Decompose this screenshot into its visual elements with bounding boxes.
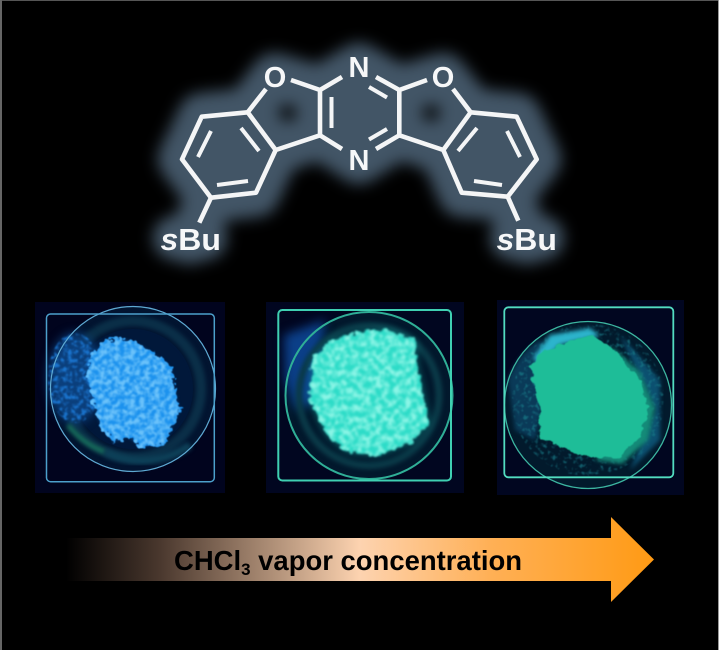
molecular glow halo: [175, 67, 542, 240]
dish outline: [504, 322, 672, 488]
atom labels: sBu: [496, 222, 557, 257]
skeletal bonds: [182, 77, 537, 223]
arrow label: vapor concentration: [251, 545, 522, 576]
photo: low vapor, blue powder: [35, 302, 225, 493]
powder: [530, 335, 648, 459]
powder halo: [90, 341, 178, 445]
atom labels: O: [264, 62, 286, 94]
atom labels: N: [349, 145, 369, 177]
slide frame: [504, 307, 673, 477]
arrow label: 3: [241, 560, 251, 579]
photo: medium vapor, teal powder: [266, 302, 464, 493]
gradient arrow: [66, 517, 654, 602]
photo: high vapor, green powder: [497, 300, 684, 495]
powder edge: [595, 345, 655, 464]
dish outline: [50, 306, 216, 472]
arrow label: CHCl: [174, 545, 241, 576]
slide frame: [46, 314, 214, 482]
slide frame: [278, 310, 451, 480]
atom labels: O: [432, 62, 454, 94]
powder halo: [312, 332, 427, 453]
powder: [310, 330, 429, 455]
powder: [88, 339, 180, 447]
chemical structure: [160, 52, 557, 257]
atom labels: sBu: [160, 222, 221, 257]
atom labels: N: [349, 52, 369, 84]
atom labels: [160, 52, 557, 257]
dish outline: [286, 312, 452, 479]
ragged powder scatter: [512, 324, 664, 476]
